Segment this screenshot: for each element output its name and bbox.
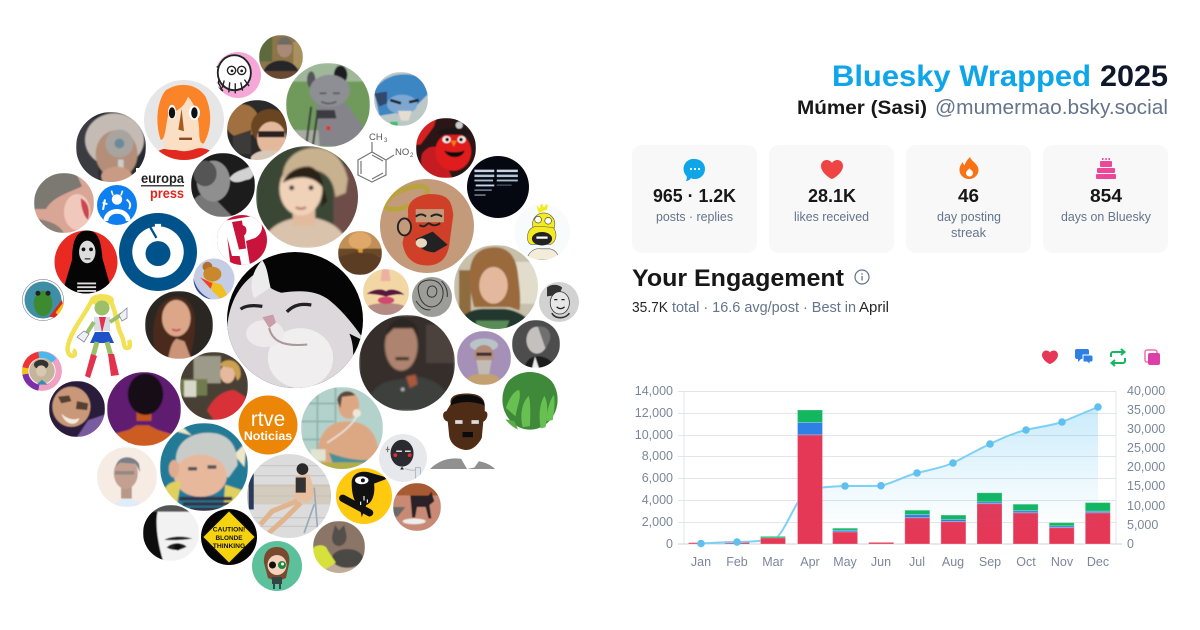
- right axis labels: 40,000: [1127, 384, 1165, 398]
- avatar: blue dragon: [374, 72, 428, 127]
- header: user name and handle: @mumermao.bsky.social: [935, 97, 1168, 119]
- avatar: older man with glasses: [97, 447, 157, 507]
- monthly bars: [688, 493, 1110, 544]
- section heading: Your Engagement: Your Engagement: [632, 265, 844, 292]
- month labels: May: [833, 555, 858, 569]
- cumulative area and line: [701, 407, 1098, 544]
- right axis labels: 30,000: [1127, 422, 1165, 436]
- stat card: days on Bluesky: [1043, 145, 1168, 253]
- stat card: posts and replies: 965 · 1.2K: [653, 185, 737, 206]
- avatar: black balloon sketch: [379, 434, 427, 482]
- right axis labels: 0: [1127, 537, 1134, 551]
- left axis labels: 4,000: [642, 493, 673, 507]
- left axis labels: 6,000: [642, 471, 673, 485]
- avatar: baby in viking hat: [158, 418, 248, 511]
- avatar: blue ring logo: [119, 213, 197, 291]
- stat card: likes received: 28.1K: [808, 185, 857, 206]
- right axis labels: 35,000: [1127, 403, 1165, 417]
- icon: birthday cake: [1096, 158, 1116, 179]
- avatar: rtve Noticias logo: Noticias: [244, 429, 293, 443]
- stat card: days on Bluesky: 854: [1090, 185, 1123, 206]
- avatar: red P logo: [217, 215, 267, 265]
- left axis labels: 14,000: [635, 384, 673, 398]
- combined chart: monthly engagement bars with cumulative line: [635, 384, 1165, 569]
- right axis labels: 5,000: [1127, 518, 1158, 532]
- avatar: grey caricature: [539, 282, 579, 322]
- avatar: woman in red reading: [180, 352, 248, 420]
- header: user name and handle: Múmer (Sasi): [797, 97, 927, 119]
- avatar: Mighty Mouse: [193, 258, 234, 300]
- stat card: days on Bluesky: days on Bluesky: [1061, 209, 1151, 224]
- avatar: moustache lips: [363, 269, 409, 318]
- avatar: caution blonde thinking sign: CAUTION!: [213, 526, 245, 533]
- avatar: dark window blinds: [467, 156, 529, 218]
- left axis labels: [635, 384, 673, 551]
- molecule: 2-nitrotoluene: 3: [384, 138, 388, 144]
- avatar: lips close-up: [34, 173, 94, 233]
- chart grid: [678, 391, 1122, 544]
- cumulative data points: [697, 403, 1102, 547]
- avatar: europa press logo: press: [150, 186, 184, 201]
- month labels: Dec: [1087, 555, 1109, 569]
- molecule: 2-nitrotoluene: [358, 132, 414, 182]
- avatar: europa press logo: [136, 168, 186, 201]
- legend: reposts arrows: [1111, 349, 1125, 366]
- month labels: Jun: [871, 555, 891, 569]
- right axis labels: 10,000: [1127, 499, 1165, 513]
- avatar: bukowski smoking: [191, 153, 255, 217]
- header: title: 2025: [1100, 60, 1168, 93]
- avatar: speaking man in suit: [512, 320, 560, 368]
- avatar: pirate Elmo: [416, 118, 476, 178]
- stat card: posts and replies: posts · replies: [656, 209, 733, 224]
- avatar: Sailor Moon figure: [68, 294, 130, 378]
- molecule: 2-nitrotoluene: CH: [369, 132, 383, 143]
- engagement summary: April: [859, 300, 889, 316]
- left axis labels: 0: [666, 537, 673, 551]
- month labels: Nov: [1051, 555, 1074, 569]
- avatar: blue emblem: [97, 185, 137, 225]
- right axis labels: 25,000: [1127, 441, 1165, 455]
- left axis labels: 10,000: [635, 428, 673, 442]
- avatar: Homer Simpson drawing: [527, 204, 558, 260]
- molecule: 2-nitrotoluene: 2: [410, 153, 414, 159]
- avatar: small brown figure: [338, 231, 382, 275]
- avatar: military officer: [359, 315, 455, 411]
- avatar: red bearded saint drawing: [380, 179, 474, 273]
- avatar: woman in black veil: [54, 230, 118, 294]
- month labels: Mar: [762, 555, 784, 569]
- stat card: day posting streak: [906, 145, 1031, 253]
- molecule: 2-nitrotoluene: NO: [395, 147, 409, 158]
- avatar: bald man at table: [259, 35, 303, 79]
- month labels: Jul: [909, 555, 925, 569]
- avatar: big white cat: [227, 252, 366, 391]
- avatar: europa press logo: europa: [141, 171, 184, 186]
- avatar: black and white eye: [143, 505, 199, 561]
- avatar: man with magnifying glass: [76, 112, 146, 186]
- avatar collage: [22, 35, 579, 591]
- stat card: day posting streak: streak: [951, 225, 986, 240]
- avatar: woman with dark hair: [145, 291, 213, 359]
- avatar: dog and cat on floor: [393, 483, 441, 531]
- avatar: shirtless man on phone: [301, 387, 383, 471]
- header: title: Bluesky Wrapped: [832, 60, 1091, 93]
- avatar: rtve Noticias logo: rtve: [251, 407, 285, 431]
- avatar: chibi green-eyed girl: [252, 541, 302, 591]
- left axis labels: 12,000: [635, 406, 673, 420]
- avatar: Jane Austen portrait: [256, 146, 364, 248]
- month labels: Sep: [979, 555, 1001, 569]
- avatar: orange haired cartoon: [144, 80, 224, 160]
- avatar: caution blonde thinking sign: BLONDE: [216, 535, 243, 542]
- avatar: yellow bird logo: [336, 468, 392, 524]
- avatar: Yoda mouse statue: [286, 63, 370, 147]
- stat card: day posting streak: day posting: [937, 209, 1001, 224]
- right axis labels: [1127, 384, 1165, 551]
- icon: flame: [960, 157, 978, 179]
- avatar: sketch of seated nude: [247, 454, 331, 538]
- chart legend: [1042, 349, 1160, 366]
- left axis labels: 2,000: [642, 515, 673, 529]
- stat card: likes received: [769, 145, 894, 253]
- avatar: green facepalm: [502, 372, 558, 430]
- avatar: woman with glasses and cat: [227, 100, 287, 160]
- engagement summary: total · 16.6 avg/post · Best in: [672, 300, 856, 316]
- right axis labels: 15,000: [1127, 479, 1165, 493]
- avatar: green troll with ring: [22, 279, 64, 321]
- month labels: [691, 555, 1109, 569]
- avatar: rainbow ring with sketch: [22, 351, 62, 391]
- avatar: long-haired rocker: [454, 245, 540, 332]
- legend: replies bubbles: [1075, 349, 1093, 364]
- avatar: back of head purple: [107, 372, 181, 446]
- avatar: bearded man in cap: [457, 331, 511, 385]
- avatar: caution blonde thinking sign: [201, 509, 257, 565]
- icon: info: [855, 270, 869, 284]
- March and April bars over line: [760, 410, 822, 544]
- avatar: tabby cat with yellow toy: [313, 521, 365, 574]
- legend: likes heart: [1042, 350, 1058, 364]
- header: user name and handle: [797, 97, 1168, 119]
- legend: quotes squares: [1145, 350, 1160, 365]
- right axis labels: 20,000: [1127, 460, 1165, 474]
- stat card: posts and replies: [632, 145, 757, 253]
- avatar: rtve Noticias logo: [238, 396, 298, 454]
- avatar: cartoon man with moustache: [430, 394, 495, 469]
- avatar: pink sheep drawing: [210, 52, 261, 98]
- avatar: caution blonde thinking sign: THINKING: [213, 543, 245, 550]
- avatar: smiling man with glasses: [49, 381, 105, 437]
- avatar: grey ink sketch: [412, 277, 452, 317]
- month labels: Oct: [1016, 555, 1036, 569]
- icon: heart: [821, 160, 843, 179]
- month labels: Aug: [942, 555, 964, 569]
- month labels: Jan: [691, 555, 711, 569]
- engagement summary: 35.7K: [632, 300, 668, 316]
- left axis labels: 8,000: [642, 449, 673, 463]
- month labels: Feb: [726, 555, 748, 569]
- stat card: day posting streak: 46: [958, 185, 979, 206]
- month labels: Apr: [800, 555, 820, 569]
- stat card: likes received: likes received: [794, 209, 869, 224]
- icon: chat bubble: [684, 159, 705, 181]
